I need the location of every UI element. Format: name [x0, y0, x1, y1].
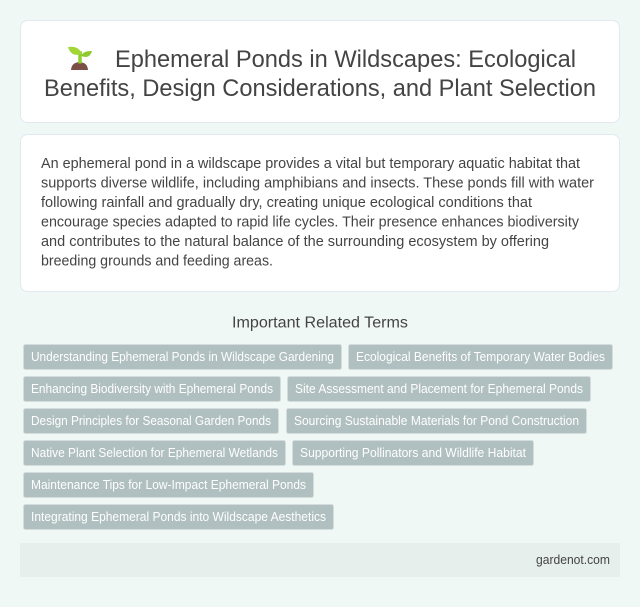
chip: Enhancing Biodiversity with Ephemeral Ponds [31, 382, 273, 396]
chip: Integrating Ephemeral Ponds into Wildscape Aesthetics [31, 510, 326, 524]
header card [20, 20, 620, 122]
intro paragraph: An ephemeral pond in a wildscape provides a vital but temporary aquatic habitat that [41, 156, 580, 172]
chip [24, 440, 286, 466]
chip: Ecological Benefits of Temporary Water Bodies [356, 350, 605, 364]
intro paragraph: supports diverse wildlife, including amphibians and insects. These ponds fill with water [41, 176, 594, 192]
chip: Design Principles for Seasonal Garden Ponds [31, 414, 271, 428]
chip: Sourcing Sustainable Materials for Pond Construction [294, 414, 579, 428]
icon: seedling [68, 47, 92, 70]
chip [24, 408, 278, 434]
footer [20, 543, 620, 577]
title: Ephemeral Ponds in Wildscapes: Ecological [115, 46, 576, 73]
chip: Understanding Ephemeral Ponds in Wildscape Gardening [31, 350, 334, 364]
intro paragraph: and contributes to the natural balance of the surrounding ecosystem by offering [41, 234, 549, 250]
chip: Site Assessment and Placement for Ephemeral Ponds [295, 382, 583, 396]
intro paragraph: encourage species adapted to rapid life cycles. Their presence enhances biodiversity [41, 214, 580, 230]
title [44, 46, 596, 102]
intro panel [20, 134, 620, 292]
intro paragraph: breeding grounds and feeding areas. [41, 254, 273, 270]
chip: Maintenance Tips for Low-Impact Ephemeral Ponds [31, 478, 306, 492]
intro paragraph: following rainfall and gradually dry, creating unique ecological conditions that [41, 195, 532, 211]
chip: Native Plant Selection for Ephemeral Wetlands [31, 446, 278, 460]
chip: Supporting Pollinators and Wildlife Habitat [300, 446, 527, 460]
intro paragraph [41, 156, 594, 270]
title: Benefits, Design Considerations, and Plant Selection [44, 75, 596, 102]
chip [286, 408, 586, 434]
chip [292, 440, 534, 466]
chip [348, 344, 612, 370]
chip [24, 504, 334, 530]
chip [24, 472, 314, 498]
chip [288, 376, 590, 402]
related term chips [24, 344, 612, 530]
heading: related terms: Important Related Terms [232, 314, 408, 332]
chip [24, 376, 280, 402]
chip [24, 344, 342, 370]
footer credit: gardenot.com [536, 552, 610, 567]
